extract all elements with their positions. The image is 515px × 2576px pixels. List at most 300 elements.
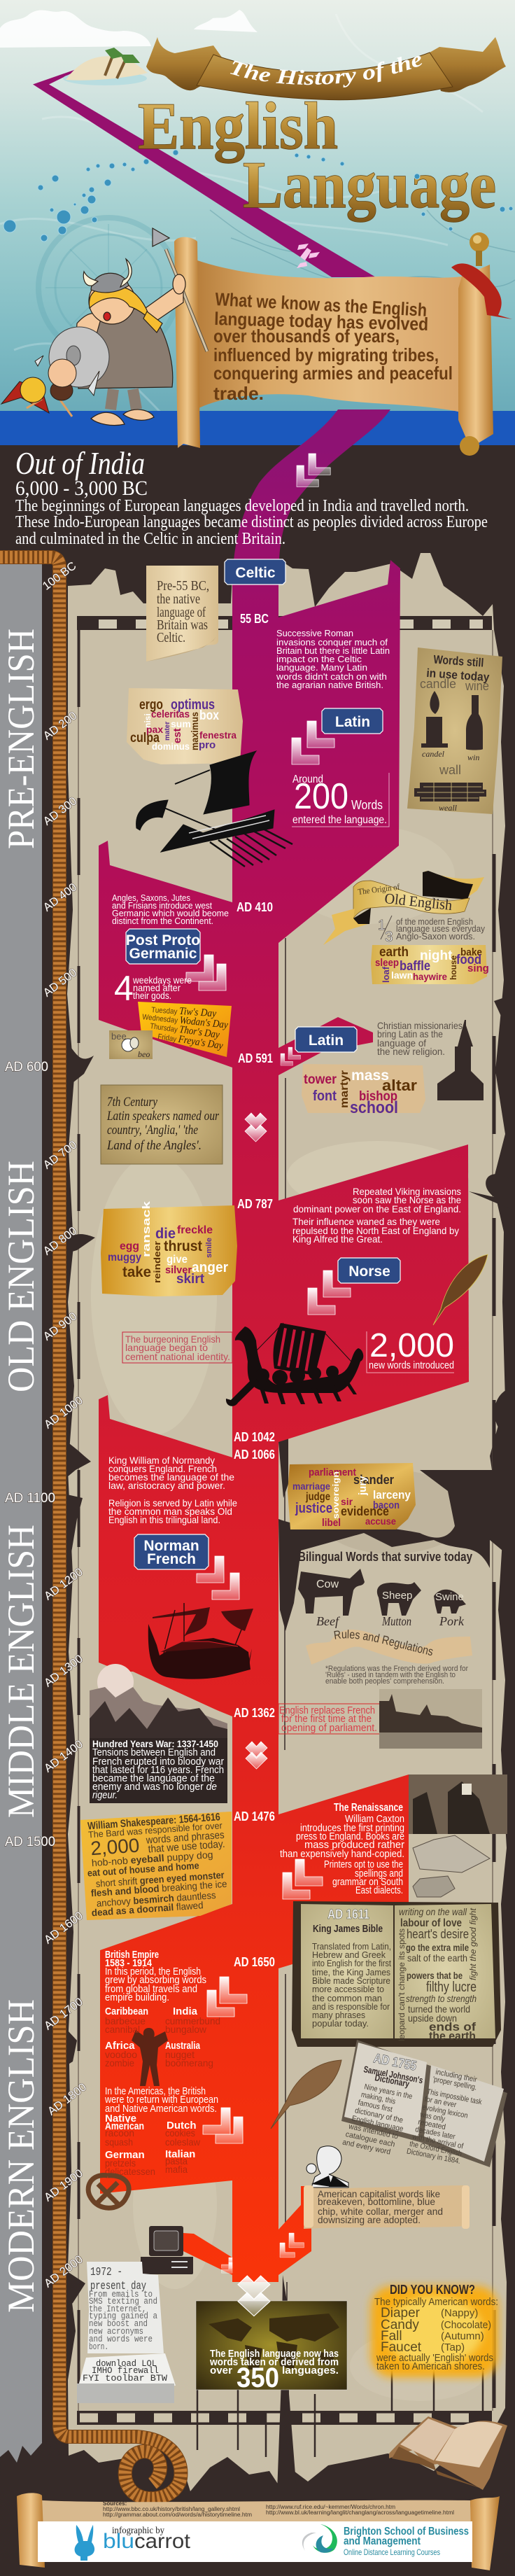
text: christian missionaries: the new religion. xyxy=(377,1046,445,1057)
note: william shakespeare: dead as a doornail flawed xyxy=(91,1899,204,1918)
text: king william: conquers England. French xyxy=(108,1463,217,1474)
note: anglo saxon words xyxy=(371,945,489,984)
header background xyxy=(0,0,515,445)
scroll: american capitalist words: chip, white collar, merger and xyxy=(318,2206,443,2217)
panel: hundred years war: Hundred Years War: 1337-1450 xyxy=(92,1738,218,1749)
note: french words: sir xyxy=(341,1496,353,1507)
book: samuel johnson dictionary: Dictionary xyxy=(374,2072,411,2090)
word lists: european regions xyxy=(105,2113,201,2177)
note: latin words xyxy=(302,1064,425,1117)
chevrons xyxy=(281,1047,301,1065)
stat: 200 words: 200 xyxy=(294,776,348,817)
sources text: http://www.bbc.co.uk/history/british/lang_gallery.shtml xyxy=(103,2506,240,2512)
note: words still in use today: wine xyxy=(465,679,489,693)
note: weekdays gods: Thursday Thor's Day xyxy=(149,1020,220,1041)
text: viking invasions: King Alfred the Great. xyxy=(292,1233,383,1245)
word lists: european regions: racoon xyxy=(105,2127,134,2138)
note: weekdays gods: Wednesday Wodan's Day xyxy=(142,1011,229,1031)
printout: present day xyxy=(77,2262,176,2403)
note: Pre-55 BC: the native xyxy=(157,592,200,607)
panel: world map 350 languages: languages. xyxy=(282,2365,339,2376)
timeline date labels: AD 300 xyxy=(41,794,79,828)
text: angles saxons: distinct from the Continent. xyxy=(112,916,213,926)
note: latin words: font xyxy=(313,1088,337,1104)
book: samuel johnson dictionary: English language xyxy=(351,2114,404,2134)
date: AD 1476: AD 1476 xyxy=(234,1809,275,1823)
logo: brighton school: and Management xyxy=(344,2535,421,2547)
icon: cow xyxy=(298,1569,365,1616)
text: the renaissance: than expensively hand-copied. xyxy=(280,1848,404,1860)
timeline date labels: AD 1500 xyxy=(5,1835,55,1849)
note: words cloud latin: box xyxy=(199,708,219,723)
chevrons xyxy=(308,1270,351,1315)
text: king william: English in this trilingual land. xyxy=(108,1514,220,1525)
stat: one third: language uses everyday xyxy=(396,923,485,934)
book: samuel johnson dictionary: with the arrival of xyxy=(411,2132,465,2151)
note: norse words: give xyxy=(167,1254,188,1266)
text: the renaissance: spellings and xyxy=(355,1868,403,1879)
badge: Post Proto Germanic xyxy=(126,929,200,964)
timeline date labels: AD 900 xyxy=(41,1310,79,1343)
callout: national identity: cement national identity. xyxy=(125,1351,230,1362)
note: norse words: muggy xyxy=(108,1252,141,1264)
small warrior xyxy=(1,356,99,416)
note: french words: larceny xyxy=(373,1488,411,1502)
map compass xyxy=(38,218,178,358)
stat: 200 words: Words xyxy=(351,798,383,812)
callout: english replaces french: opening of parliament. xyxy=(281,1722,377,1734)
panel: did you know: Faucet xyxy=(381,2340,422,2355)
word lists: empire regions: voodoo xyxy=(105,2049,137,2060)
printout: present day: typing gained a xyxy=(89,2311,157,2321)
timeline date labels: 100 BC xyxy=(41,559,78,593)
note: words still in use today xyxy=(407,648,502,814)
book: king james bible: ends of xyxy=(429,2020,476,2033)
note: norse words: silver xyxy=(165,1264,192,1276)
note: 7th century: country, 'Anglia,' 'the xyxy=(107,1123,198,1138)
note: words cloud latin: optimus xyxy=(171,697,215,713)
callout: english replaces french xyxy=(278,1704,380,1734)
note: french words: slander xyxy=(353,1473,394,1487)
book: samuel johnson dictionary: was only xyxy=(419,2110,446,2124)
timeline date labels: AD 200 xyxy=(41,709,79,743)
note: anglo saxon words: loaf xyxy=(381,966,391,983)
note: words cloud latin: nisi xyxy=(143,713,153,728)
chevrons xyxy=(245,1113,267,1142)
stat: one third: 1 xyxy=(378,918,386,933)
note: french words: judge xyxy=(305,1491,330,1503)
picture: parliament xyxy=(379,1689,482,1749)
printout: present day: From emails to xyxy=(89,2289,153,2300)
book: king james bible: filthy lucre xyxy=(426,1980,477,1995)
note: william shakespeare: 2,000 xyxy=(90,1834,140,1859)
note: words cloud latin: fenestra xyxy=(199,729,237,741)
note: french words: jury xyxy=(357,1476,369,1496)
sources text: http://www.ruf.rice.edu/~kemmer/Words/chron.htm xyxy=(266,2504,395,2510)
date: AD 1362: AD 1362 xyxy=(234,1706,275,1720)
badge: Norse: Norse xyxy=(348,1264,390,1280)
note: words cloud latin: pro xyxy=(199,739,216,751)
period label: old english: OLD ENGLISH xyxy=(0,1161,42,1392)
note: words still in use today: weall xyxy=(439,803,458,813)
note: william shakespeare: William Shakespeare: 1564-1616 xyxy=(87,1811,220,1832)
badge: Latin xyxy=(295,1027,357,1052)
panel: did you know: (Autumn) xyxy=(441,2330,484,2342)
icon: cow: Cow xyxy=(316,1578,339,1590)
note: french words: justice xyxy=(295,1501,332,1516)
date: 55 BC: 55 BC xyxy=(240,612,269,626)
book: samuel johnson dictionary: This impossible task xyxy=(426,2087,483,2106)
printout: present day: the Internet, xyxy=(89,2304,146,2314)
viking woman xyxy=(76,228,207,426)
text: angles saxons xyxy=(112,892,229,926)
timeline date labels: AD 1900 xyxy=(42,2166,85,2204)
note: 7th century: 7th Century xyxy=(107,1095,157,1110)
scroll: sources xyxy=(17,2493,500,2570)
badge: Latin: Latin xyxy=(335,714,370,730)
note: bee xyxy=(109,1030,153,1059)
intro paragraph: over thousands of years, xyxy=(213,326,400,346)
intro paragraph: influenced by migrating tribes, xyxy=(213,344,439,365)
book: samuel johnson dictionary: catalogue each xyxy=(345,2130,396,2149)
scroll: american capitalist words: downsizing are adopted. xyxy=(318,2214,421,2225)
scroll: american capitalist words: American capitalist words like xyxy=(318,2188,440,2199)
logo: blucarrot: blu xyxy=(103,2530,134,2553)
callout: national identity xyxy=(122,1332,232,1363)
book: samuel johnson dictionary: including their xyxy=(435,2068,478,2084)
note: Pre-55 BC: language of xyxy=(157,605,206,620)
note: words cloud latin: dominus xyxy=(152,741,190,752)
note: norse words xyxy=(101,1200,237,1296)
word lists: european regions: delicatessen xyxy=(105,2166,155,2177)
note: william shakespeare xyxy=(80,1811,232,1920)
note: norse words: skirt xyxy=(176,1272,205,1287)
stat: 200 words: Around xyxy=(292,774,323,785)
text: Roman invasions: the agrarian native British. xyxy=(276,680,383,690)
book: samuel johnson dictionary: repeated xyxy=(417,2118,446,2132)
text: christian missionaries: Christian missionaries xyxy=(377,1020,463,1031)
book: samuel johnson dictionary: 'proper spelling. xyxy=(432,2076,477,2092)
note: words still in use today: Words still xyxy=(433,653,484,670)
stat: one third: 3 xyxy=(385,929,393,945)
note: words cloud latin: ergo xyxy=(139,697,163,713)
book: king james bible: time, the King James xyxy=(312,1967,390,1977)
labels: beef mutton pork: Mutton xyxy=(381,1614,411,1628)
book: king james bible: turned the world xyxy=(408,2003,470,2015)
chevrons xyxy=(238,2276,270,2316)
note: french words: bacon xyxy=(373,1499,400,1511)
note: french words: libel xyxy=(322,1517,341,1529)
note: anglo saxon words: sleep xyxy=(375,957,399,969)
labels: beef mutton pork xyxy=(316,1614,465,1628)
note: norse words: die xyxy=(155,1226,176,1242)
text: viking invasions: Repeated Viking invasions xyxy=(353,1186,461,1197)
book: king james bible: go the extra mile xyxy=(406,1942,469,1953)
panel: world map 350 languages: The English language now has xyxy=(210,2348,339,2360)
icon: swine xyxy=(434,1590,466,1614)
text: christian missionaries: bring Latin as the xyxy=(377,1028,443,1040)
note: words cloud latin: pax xyxy=(146,724,163,735)
purple path ribbon from island xyxy=(33,65,376,277)
timeline date labels: AD 1400 xyxy=(42,1737,85,1775)
panel: did you know: were actually 'English' words xyxy=(376,2352,493,2364)
text: the renaissance: grammar on South xyxy=(332,1876,403,1888)
sources text: Sources: xyxy=(103,2500,127,2507)
labels: beef mutton pork: Pork xyxy=(439,1614,465,1628)
timeline date labels: AD 1000 xyxy=(42,1394,85,1432)
note: norse words: freckle xyxy=(177,1224,213,1236)
note: anglo saxon words: baffle xyxy=(400,959,430,974)
note: words still in use today: win xyxy=(467,752,479,762)
word lists: empire regions: nugget xyxy=(165,2049,195,2060)
text: in the americas: In the Americas, the British xyxy=(105,2085,206,2097)
text: king william: King William of Normandy xyxy=(108,1455,215,1466)
printout: present day: and words were xyxy=(89,2334,153,2344)
text: angles saxons: Angles, Saxons, Jutes xyxy=(112,892,190,903)
note: anglo saxon words: haywire xyxy=(413,971,447,982)
printout: present day: SMS texting and xyxy=(89,2296,157,2306)
note: anglo saxon words: food xyxy=(456,953,481,967)
note: anglo saxon words: night xyxy=(420,948,453,963)
panel: hundred years war: rigeur. xyxy=(92,1789,118,1801)
book: samuel johnson dictionary: making, this xyxy=(360,2091,397,2106)
heading: Out of India xyxy=(15,445,488,548)
note: words cloud latin: maximus xyxy=(189,712,200,750)
panel: did you know xyxy=(371,2283,498,2377)
timeline date labels: AD 1800 xyxy=(45,2080,89,2118)
text: Roman invasions: invasions conquer much of xyxy=(276,637,388,648)
chevrons xyxy=(292,721,334,764)
callout: english replaces french: English replaces French xyxy=(279,1704,375,1716)
word lists: empire regions: Australia xyxy=(165,2040,201,2052)
book: samuel johnson dictionary: and every word xyxy=(341,2138,391,2157)
note: norse words: take xyxy=(122,1264,151,1280)
text: british empire: from global travels and xyxy=(105,1983,197,1995)
book: king james bible: King James Bible xyxy=(313,1923,383,1935)
shield xyxy=(49,327,109,387)
book: samuel johnson dictionary: for an ever xyxy=(424,2095,457,2109)
heading: Out of India: and culminated in the Celtic in ancient Britain. xyxy=(15,530,285,548)
grey period column xyxy=(0,564,42,2463)
word lists: european regions: squash xyxy=(105,2136,133,2148)
panel: world map 350 languages: 350 xyxy=(237,2362,279,2393)
word lists: european regions: pretzels xyxy=(105,2157,136,2169)
book: king james bible: into English for the first xyxy=(312,1958,391,1968)
viking longship xyxy=(226,1323,363,1406)
note: words still in use today: candel xyxy=(422,749,445,759)
text: british empire xyxy=(105,1949,206,2003)
text: british empire: 1583 - 1914 xyxy=(105,1957,153,1969)
word lists: empire regions: bungalow xyxy=(165,2024,207,2035)
book: samuel johnson dictionary: was intended to xyxy=(347,2122,399,2141)
text: viking invasions: soon saw the Norse as the xyxy=(353,1194,461,1205)
period label: middle english: MIDDLE ENGLISH xyxy=(0,1525,42,1818)
printout: present day: IMHO firewall xyxy=(92,2365,159,2376)
parchment panel xyxy=(67,553,507,2491)
printout: present day: born. xyxy=(89,2342,108,2352)
stat: 200 words xyxy=(292,773,389,827)
word lists: empire regions: zombie xyxy=(105,2057,134,2068)
figure: zombie xyxy=(132,2028,168,2086)
icon: candle xyxy=(421,691,448,748)
note: norse words: thrust xyxy=(164,1238,202,1254)
sources text: http://www.bl.uk/learning/langlit/changlang/across/languagetimeline.html xyxy=(266,2510,454,2516)
book: samuel johnson dictionary: AD 1755 xyxy=(372,2051,418,2074)
word lists: european regions: Italian xyxy=(165,2148,195,2160)
text: bilingual words heading: Bilingual Words that survive today xyxy=(298,1550,472,1564)
chevrons xyxy=(221,2233,304,2273)
sources text xyxy=(103,2500,454,2518)
book: king james bible: popular today. xyxy=(312,2018,369,2029)
note: william shakespeare: The Bard was responsible for over xyxy=(88,1820,223,1840)
scroll: american capitalist words: breakeven, bottomline, blue xyxy=(318,2196,435,2207)
printout: present day: FYI toolbar BTW xyxy=(83,2373,167,2384)
note: norse words: egg xyxy=(120,1240,139,1252)
word lists: european regions: German xyxy=(105,2149,145,2161)
book: king james bible: many phrases xyxy=(312,2010,365,2020)
word lists: european regions: cookies xyxy=(165,2127,195,2138)
logo: blucarrot xyxy=(75,2525,191,2561)
text: Roman invasions xyxy=(276,628,390,690)
text: the renaissance: introduces the first printing xyxy=(300,1822,404,1834)
note: words cloud latin: mater xyxy=(164,722,171,741)
word lists: european regions: mafia xyxy=(165,2164,188,2175)
note: william shakespeare: hob-nob eyeball puppy dog xyxy=(91,1849,213,1868)
panel: hundred years war: French erupted into bloody war xyxy=(92,1756,224,1768)
note: french words: sovereign xyxy=(331,1471,341,1519)
note: french words: marriage xyxy=(292,1480,330,1492)
panel: world map 350 languages: words taken or derived from xyxy=(209,2356,339,2368)
text: the renaissance: William Caxton xyxy=(345,1813,404,1825)
timeline date labels: AD 1300 xyxy=(42,1652,85,1690)
book: king james bible: Hebrew and Greek xyxy=(312,1949,386,1960)
book: samuel johnson dictionary: famous first xyxy=(357,2099,393,2114)
stat: 4 weekdays xyxy=(114,969,192,1008)
text: Roman invasions: language. Many Latin xyxy=(276,662,367,673)
text: british empire: empire building. xyxy=(105,1991,169,2003)
chevrons in heading xyxy=(297,454,330,486)
word lists: empire regions xyxy=(105,2005,220,2068)
timeline date labels: AD 800 xyxy=(41,1224,79,1258)
note: william shakespeare: flesh and blood breaking the ice xyxy=(90,1878,227,1898)
chevrons xyxy=(246,1742,267,1769)
note: norse words: reindeer xyxy=(152,1241,162,1283)
badge: Norman French: French xyxy=(147,1551,196,1567)
text: in the americas xyxy=(104,2085,218,2115)
note: latin words: bishop xyxy=(359,1089,397,1104)
note: Pre-55 BC: Pre-55 BC, xyxy=(157,578,209,594)
word lists: empire regions: Africa xyxy=(105,2040,135,2052)
panel: did you know: Fall xyxy=(381,2329,402,2344)
logo: brighton school xyxy=(302,2524,469,2557)
note: Pre-55 BC: Britain was xyxy=(157,617,208,633)
book: king james bible: labour of love xyxy=(400,1917,462,1929)
picture: caxton xyxy=(409,1774,507,1834)
book: king james bible: and is responsible for xyxy=(312,2001,390,2012)
callout: national identity: The burgeoning English xyxy=(125,1334,220,1345)
printout: present day: download LOL xyxy=(96,2358,157,2369)
title: English Language: English xyxy=(138,89,338,163)
word lists: european regions: American xyxy=(105,2120,144,2132)
book: king james bible: the common man xyxy=(312,1993,382,2003)
date: AD 787: AD 787 xyxy=(237,1197,273,1211)
book: samuel johnson dictionary: Dictionary in 1884. xyxy=(406,2147,461,2166)
stat: one third: of the modern English xyxy=(396,916,473,927)
icon: pretzel xyxy=(88,2176,129,2208)
text: king william: Religion is served by Latin while xyxy=(108,1497,237,1508)
book: king james bible: writing on the wall xyxy=(399,1906,467,1917)
text: Roman invasions: words didn't catch on with xyxy=(276,671,387,682)
book: king james bible: fight the good fight xyxy=(468,1907,478,1980)
date: AD 1650: AD 1650 xyxy=(234,1955,275,1969)
icon: sheep xyxy=(377,1582,421,1616)
text: king william: the common man speaks Old xyxy=(108,1506,232,1517)
text: the renaissance: press to England. Books are xyxy=(296,1830,404,1842)
book: king james bible xyxy=(292,1901,501,2047)
note: weekdays gods xyxy=(138,1002,232,1057)
panel: did you know: (Nappy) xyxy=(441,2307,478,2319)
island xyxy=(63,48,148,85)
film strip frames and frame lines xyxy=(77,616,494,2492)
chevrons xyxy=(207,1977,247,2017)
title banner: The History of the xyxy=(230,56,423,88)
text: viking invasions: repulsed to the North East of England by xyxy=(292,1225,459,1236)
stat: 4 weekdays: named after xyxy=(133,982,181,993)
note: latin words: mass xyxy=(351,1068,389,1084)
word lists: empire regions: Caribbean xyxy=(105,2005,148,2017)
note: norse words: smile xyxy=(205,1238,213,1258)
note: anglo saxon words: earth xyxy=(379,945,409,960)
text: christian missionaries xyxy=(377,1020,463,1057)
book: samuel johnson dictionary: evolving lexicon xyxy=(421,2103,469,2120)
torn dark edge blobs xyxy=(0,994,515,2478)
stat: 2,000 words: new words introduced xyxy=(369,1359,454,1371)
text: viking invasions: dominant power on the East of England. xyxy=(293,1203,461,1214)
note: bee: bee xyxy=(111,1031,127,1042)
badge: Latin xyxy=(322,708,383,734)
footnote: 'Rules' - used in tandem with the English to xyxy=(325,1671,456,1679)
logo: blucarrot: carrot xyxy=(134,2530,191,2553)
icon: quill xyxy=(271,2060,341,2129)
note: latin words: martyr xyxy=(339,1070,351,1108)
note: Pre-55 BC: Celtic. xyxy=(157,630,185,645)
rope xyxy=(0,557,181,2498)
note: french words: evidence xyxy=(341,1504,389,1518)
timeline date labels: AD 2000 xyxy=(42,2253,85,2290)
text: british empire: British Empire xyxy=(105,1949,159,1961)
callout: english replaces french: for the first time at the xyxy=(281,1713,372,1725)
note: 7th century: Land of the Angles'. xyxy=(106,1138,202,1153)
text: british empire: In this period, the English xyxy=(105,1966,201,1977)
note: words still in use today: in use today xyxy=(426,666,490,684)
intro paragraph: What we know as the English xyxy=(215,288,428,321)
note: latin words: school xyxy=(350,1098,398,1117)
text: Roman invasions: Britain but there is little Latin xyxy=(276,645,390,656)
note: words cloud latin: est xyxy=(171,728,183,743)
figure: old man xyxy=(306,2146,348,2188)
icon: old book xyxy=(389,2416,507,2490)
word lists: empire regions: cummerbund xyxy=(165,2015,220,2026)
note: 7th century xyxy=(101,1085,223,1164)
text: Roman invasions: impact on the Celtic xyxy=(276,654,362,664)
text: viking invasions: Their influence waned as they were xyxy=(292,1216,440,1227)
note: french words: accuse xyxy=(365,1516,396,1527)
word lists: empire regions: boomerang xyxy=(165,2057,213,2068)
panel: hundred years war: that lasted for 116 years. French xyxy=(92,1764,224,1776)
panel: did you know: Diaper xyxy=(381,2306,421,2320)
note: anglo saxon words: lawn xyxy=(391,969,413,981)
badge: Norse xyxy=(338,1258,400,1283)
